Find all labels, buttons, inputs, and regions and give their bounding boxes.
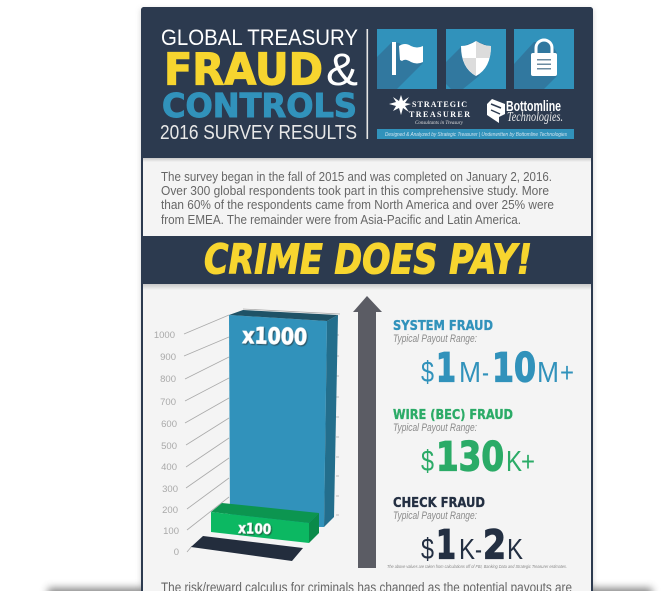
- bar: system fraud: [229, 310, 338, 527]
- check fraud: [393, 496, 523, 561]
- heading: fraud: FRAUD: [164, 44, 323, 96]
- payout value: +: [560, 357, 574, 388]
- payout value: $: [421, 533, 434, 566]
- logo: strategic treasurer: STRATEGIC: [412, 100, 467, 109]
- arrow: rising payout: [353, 296, 382, 568]
- axis labels: 700: [160, 397, 176, 408]
- payout value: 10: [492, 346, 536, 392]
- logo: bottomline technologies: [487, 99, 563, 125]
- payout value: [421, 350, 573, 384]
- panel: intro text: than 60% of the respondents came from North America and over 25% were: [161, 197, 554, 212]
- axis labels: 1000: [154, 330, 175, 341]
- payout value: 1: [436, 522, 456, 568]
- axis labels: 600: [161, 419, 177, 430]
- panel: infographic page: [141, 7, 593, 598]
- panel: intro text: Over 300 global respondents took part in this comprehensive study. More: [161, 183, 549, 198]
- icon: padlock: [514, 29, 574, 89]
- payout value: K: [507, 534, 524, 566]
- payout value: [421, 528, 523, 561]
- payout value: +: [521, 446, 535, 477]
- panel: intro text: The survey began in the fall of 2015 and was completed on January 2, 2016.: [161, 169, 552, 184]
- logo: strategic treasurer: TREASURER: [409, 110, 470, 119]
- axis labels: 300: [162, 484, 178, 495]
- closing text: The risk/reward calculus for criminals has changed as the potential payouts are: [161, 580, 572, 595]
- footnote: The above values are taken from calculations off of FBI, Banking Data and Strategic Treasurer estimates.: [387, 564, 567, 569]
- panel: intro text: [143, 158, 591, 224]
- credit strip: [377, 129, 574, 139]
- payout value: $: [421, 445, 434, 478]
- bar chart: [154, 309, 340, 561]
- axis labels: 500: [161, 441, 177, 452]
- payout value: K: [459, 534, 476, 566]
- bar label: x1000: x1000: [242, 324, 307, 351]
- axis labels: 800: [160, 374, 176, 385]
- divider: [366, 29, 368, 139]
- bar: wire fraud: [211, 503, 319, 543]
- bar: check fraud: [191, 536, 303, 561]
- payout value: K: [506, 446, 523, 478]
- payout value: M: [537, 357, 559, 389]
- panel: header: [141, 7, 593, 139]
- axis labels: 900: [160, 352, 176, 363]
- system fraud: [394, 320, 573, 384]
- logo: strategic treasurer: Consultants in Treasury: [415, 121, 464, 126]
- logo: bottomline technologies: Bottomline: [506, 99, 561, 115]
- credit strip: Designed & Analyzed by Strategic Treasurer | Underwritten by Bottomline Technologies: [385, 132, 567, 138]
- axis labels: [154, 330, 179, 558]
- wire fraud: WIRE (BEC) FRAUD: [393, 407, 513, 423]
- logo: bottomline technologies: Technologies.: [507, 110, 563, 125]
- axis labels: 100: [163, 526, 179, 537]
- payout value: [421, 440, 534, 473]
- payout value: -: [475, 534, 482, 565]
- icon: flag: [377, 29, 437, 89]
- payout value: M: [459, 357, 481, 389]
- check fraud: Typical Payout Range:: [393, 510, 477, 522]
- panel: chart section: [143, 284, 591, 595]
- axis labels: 0: [174, 547, 179, 558]
- logo: strategic treasurer: [389, 95, 470, 126]
- payout value: 2: [483, 522, 506, 568]
- heading: controls: CONTROLS: [162, 86, 357, 125]
- heading: global treasury: GLOBAL TREASURY: [161, 25, 358, 50]
- payout value: $: [421, 356, 434, 389]
- axis labels: 400: [161, 462, 177, 473]
- heading: ampersand: &: [326, 44, 358, 95]
- panel: intro text: from EMEA. The remainder were from Asia-Pacific and Latin America.: [161, 212, 521, 227]
- banner: crime does pay: CRIME DOES PAY!: [204, 236, 532, 284]
- payout value: 1: [436, 346, 456, 392]
- system fraud: SYSTEM FRAUD: [393, 318, 493, 334]
- axis labels: 200: [162, 505, 178, 516]
- bar label: x100: x100: [238, 521, 272, 538]
- wire fraud: [393, 408, 534, 473]
- heading: survey results: 2016 SURVEY RESULTS: [160, 122, 357, 144]
- payout value: -: [482, 357, 489, 388]
- system fraud: Typical Payout Range:: [393, 333, 477, 345]
- icon: shield: [446, 29, 506, 89]
- wire fraud: Typical Payout Range:: [393, 422, 477, 434]
- payout value: 130: [436, 434, 504, 480]
- check fraud: CHECK FRAUD: [393, 495, 485, 511]
